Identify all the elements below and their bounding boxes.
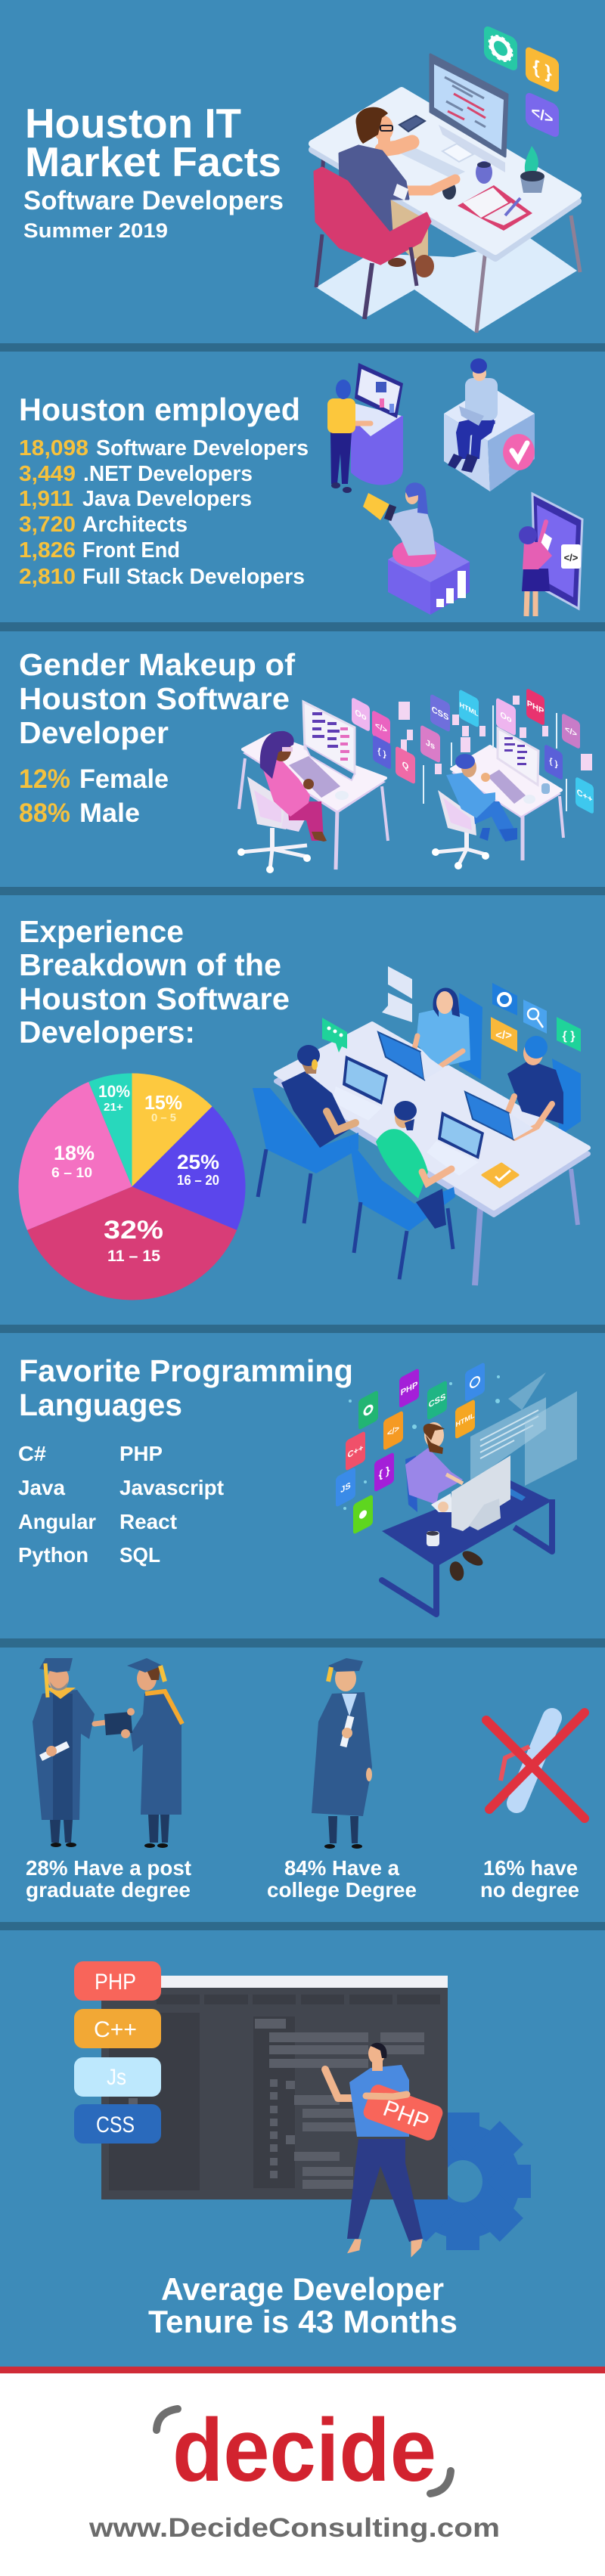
illustration: two graduates with diploma xyxy=(33,1658,182,1848)
employment list: 1,826 xyxy=(19,538,76,563)
tile: Js xyxy=(74,2057,161,2097)
heading: Developer xyxy=(19,715,169,750)
code window xyxy=(101,1976,448,2199)
language list: C# xyxy=(18,1442,46,1465)
language list: PHP xyxy=(119,1442,163,1465)
pie chart: experience: 0 – 5 xyxy=(151,1111,176,1124)
caption: college degree xyxy=(267,1856,417,1902)
gender stat: female: 12% xyxy=(19,764,70,794)
illustration: man holding PHP tile: PHP xyxy=(380,2096,432,2135)
icon: braces tile xyxy=(526,45,559,94)
illustration: man on cube with laptop xyxy=(444,358,535,491)
date: Summer 2019 xyxy=(23,219,168,242)
gender stat: male: 88% xyxy=(19,798,70,828)
employment list: .NET Developers xyxy=(83,462,253,486)
caption: no degree xyxy=(480,1856,579,1902)
employment list: Java Developers xyxy=(82,487,252,511)
icons: language tiles: CSS xyxy=(432,705,448,723)
language list xyxy=(18,1442,224,1567)
gender stat: female: Female xyxy=(79,764,169,794)
employment list xyxy=(19,436,309,589)
tenure statement xyxy=(148,2271,458,2339)
icon: check tile xyxy=(482,1164,518,1187)
pie chart: experience: 10% xyxy=(98,1082,130,1101)
icon: braces tile xyxy=(557,1017,581,1052)
illustration: team at table xyxy=(253,988,588,1285)
language list: Angular xyxy=(18,1510,96,1533)
icon: braces tile: { } xyxy=(563,1030,575,1043)
employment list: 1,911 xyxy=(19,487,73,511)
icons: language tiles: Oo xyxy=(500,710,512,725)
heading xyxy=(19,1353,353,1422)
icon: chat tile xyxy=(322,1018,347,1052)
title: Market Facts xyxy=(25,138,281,185)
language list: SQL xyxy=(119,1543,160,1567)
illustration: woman at big tablet: </> xyxy=(564,552,579,563)
illustration: developer with holograms xyxy=(343,1372,577,1614)
panel: gender makeup xyxy=(19,647,594,873)
decoration: poles and small tags xyxy=(399,696,592,811)
logo: decide: decide xyxy=(172,2401,436,2500)
heading: Breakdown of the xyxy=(19,947,281,982)
icons: language tiles: Js xyxy=(426,737,436,752)
caption: no degree: no degree xyxy=(480,1878,579,1902)
icons: language tiles: CSS xyxy=(429,1392,445,1410)
icon: gear tile xyxy=(484,24,517,73)
icons: language tiles: </> xyxy=(565,724,577,739)
icon: code tile: </> xyxy=(495,1029,512,1042)
gender stat: female xyxy=(19,764,169,794)
panel: footer xyxy=(0,2367,605,2576)
employment list: 3,720 xyxy=(19,513,76,537)
icon: speech bubbles xyxy=(382,966,412,1022)
icons: language tiles: HTML xyxy=(460,701,479,719)
icons: language tiles: Oo xyxy=(355,708,367,723)
icon: code tile xyxy=(526,91,559,139)
heading: Houston Software xyxy=(19,681,290,716)
tile: CSS: CSS xyxy=(96,2113,135,2137)
icons: language tiles: { } xyxy=(549,756,558,770)
icons: language tiles: { } xyxy=(379,1464,390,1482)
gender stat: male: Male xyxy=(79,798,140,828)
icons: language tiles: C++ xyxy=(348,1443,364,1460)
icon: magnifier tile xyxy=(523,1000,547,1034)
employment list: 18,098 xyxy=(19,436,88,460)
icons: language tiles: </> xyxy=(387,1423,399,1439)
icon: gear xyxy=(394,2113,531,2250)
heading: Developers: xyxy=(19,1015,195,1049)
employment list: 2,810 xyxy=(19,565,76,589)
icons: language tiles: </> xyxy=(375,720,387,736)
illustration: woman at big tablet xyxy=(519,494,582,616)
heading: Languages xyxy=(19,1387,182,1422)
icons: language tiles: Q xyxy=(402,759,408,772)
panel: title header xyxy=(23,24,580,333)
tile: C++: C++ xyxy=(94,2017,137,2042)
title: Houston IT xyxy=(25,100,241,147)
panel: favorite programming languages xyxy=(18,1353,577,1614)
heading xyxy=(19,647,295,750)
icons: language tiles xyxy=(336,1362,485,1535)
panel: developer tenure xyxy=(74,1961,531,2339)
language list: Java xyxy=(18,1476,65,1499)
icons: language tiles: JS xyxy=(340,1480,351,1495)
icons: language tiles: { } xyxy=(377,746,386,760)
website url: www.DecideConsulting.com xyxy=(88,2513,500,2543)
pie chart: experience: 11 – 15 xyxy=(107,1248,160,1265)
tile: PHP xyxy=(74,1961,161,2001)
illustration: female developer at desk xyxy=(237,702,388,873)
illustration: woman on purple cube with charts xyxy=(363,482,470,615)
language list: Javascript xyxy=(119,1476,224,1499)
icon: code tile xyxy=(491,1017,517,1052)
pie chart: experience xyxy=(18,1074,246,1300)
panel: experience breakdown xyxy=(18,914,588,1300)
heading: Experience xyxy=(19,914,184,949)
title xyxy=(25,100,281,185)
icons: language tiles: PHP xyxy=(401,1380,417,1398)
icon: gear tile xyxy=(492,983,517,1015)
icon: braces tile: { } xyxy=(532,55,552,84)
heading: Favorite Programming xyxy=(19,1353,353,1388)
heading: Houston Software xyxy=(19,981,290,1016)
employment list: Software Developers xyxy=(96,436,309,460)
pie chart: experience: 16 – 20 xyxy=(177,1173,219,1188)
illustration: developer at desk xyxy=(312,54,580,333)
pie chart: experience: 15% xyxy=(144,1091,182,1114)
language list: Python xyxy=(18,1543,88,1567)
icon: crossed-out diploma xyxy=(486,1713,585,1818)
subtitle: Software Developers xyxy=(23,186,284,215)
heading xyxy=(19,914,290,1049)
icons: language tiles: HTML xyxy=(456,1412,475,1429)
pie chart: experience: 32% xyxy=(104,1216,163,1245)
caption: post graduate: 28% Have a post xyxy=(26,1856,191,1880)
employment list: Architects xyxy=(82,513,188,537)
tenure statement: Average Developer xyxy=(161,2271,444,2307)
tile: CSS xyxy=(74,2104,161,2144)
illustration: man holding PHP tile xyxy=(325,2043,445,2255)
pie chart: experience: 21+ xyxy=(104,1101,123,1114)
heading: Houston employed xyxy=(19,392,300,427)
icons: language tiles: C++ xyxy=(577,787,593,804)
illustration: male developer at desk xyxy=(432,728,563,870)
illustration: single graduate xyxy=(312,1658,372,1849)
caption: college degree: college Degree xyxy=(267,1878,417,1902)
panel: education xyxy=(26,1658,585,1902)
language list: React xyxy=(119,1510,177,1533)
pie chart: experience: 25% xyxy=(177,1151,219,1173)
icons: language tiles xyxy=(352,688,594,814)
panel: Houston employed xyxy=(19,358,582,616)
tile: C++ xyxy=(74,2009,161,2048)
caption: post graduate: graduate degree xyxy=(26,1878,191,1902)
caption: no degree: 16% have xyxy=(483,1856,578,1880)
tile: PHP: PHP xyxy=(95,1970,136,1995)
gender stat: male xyxy=(19,798,140,828)
employment list: Front End xyxy=(82,538,180,563)
icons: language tiles: PHP xyxy=(527,699,544,717)
tile: Js: Js xyxy=(107,2065,126,2090)
employment list: Full Stack Developers xyxy=(82,565,305,589)
pie chart: experience: 18% xyxy=(54,1142,95,1164)
tenure statement: Tenure is 43 Months xyxy=(148,2304,458,2339)
illustration: man at purple kiosk xyxy=(327,363,403,493)
caption: college degree: 84% Have a xyxy=(284,1856,399,1880)
employment list: 3,449 xyxy=(19,462,76,486)
icon: code tile: </> xyxy=(532,102,553,129)
pie chart: experience: 6 – 10 xyxy=(51,1165,92,1180)
heading: Gender Makeup of xyxy=(19,647,295,682)
caption: post graduate xyxy=(26,1856,191,1902)
